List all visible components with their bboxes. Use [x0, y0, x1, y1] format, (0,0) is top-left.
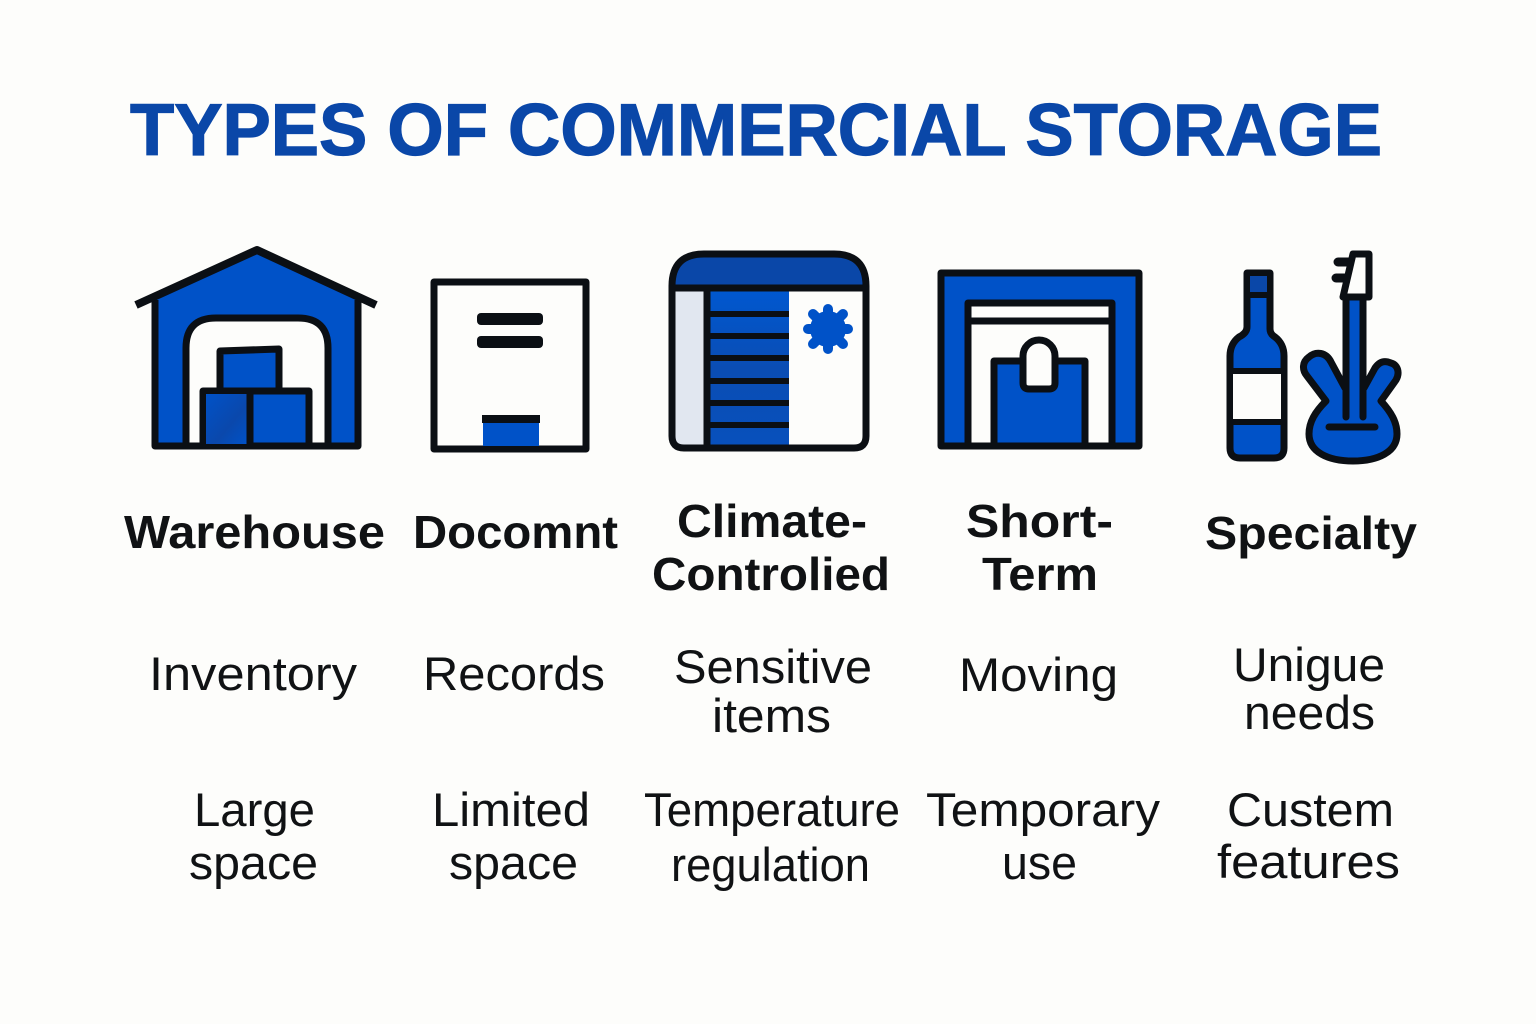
icon: document storage [434, 282, 586, 449]
feature: Temperature regulation: Temperature [644, 783, 900, 836]
icon: short-term unit [941, 273, 1139, 446]
use: Sensitive items: items [712, 689, 831, 742]
label: Docomnt: Docomnt [413, 506, 618, 558]
column: document [413, 282, 618, 889]
label: Climate-Controlied: Controlied [652, 548, 890, 600]
column: climate-controlled [644, 254, 900, 891]
use: Sensitive items: Sensitive [674, 640, 872, 693]
use: Sensitive items [674, 640, 872, 742]
feature: Temporary use: Temporary [926, 783, 1161, 836]
label: Short-Term [966, 495, 1113, 600]
title: TYPES OF COMMERCIAL STORAGE [130, 90, 1382, 171]
use: Unigue needs: needs [1244, 686, 1375, 739]
use: Unigue needs: Unigue [1233, 638, 1385, 691]
feature: Custem features: features [1217, 835, 1400, 888]
feature: Temporary use [926, 783, 1161, 889]
column: specialty [1205, 254, 1417, 888]
label: Specialty: Specialty [1205, 507, 1417, 559]
feature: Temperature regulation [644, 783, 900, 891]
feature: Limited space: space [449, 836, 578, 889]
icon: climate-controlled unit [672, 254, 866, 448]
feature: Large space: Large [194, 783, 315, 836]
use: Moving: Moving [959, 648, 1118, 701]
column: short-term [926, 273, 1161, 889]
label: Short-Term: Short- [966, 495, 1113, 547]
icon: snowflake gear [808, 309, 848, 349]
feature: Custem features: Custem [1227, 783, 1394, 836]
column: warehouse [124, 250, 385, 889]
label: Short-Term: Term [982, 548, 1098, 600]
use: Inventory: Inventory [149, 647, 358, 700]
label: Warehouse: Warehouse [124, 506, 385, 558]
use: Unigue needs [1233, 638, 1385, 739]
icon: warehouse [136, 250, 376, 446]
label: Climate-Controlied [652, 495, 890, 600]
feature: Limited space: Limited [432, 783, 590, 836]
icon: guitar [1303, 254, 1398, 461]
label: Climate-Controlied: Climate- [677, 495, 867, 547]
icon: wine bottle [1230, 273, 1284, 458]
feature: Limited space [432, 783, 590, 889]
feature: Temperature regulation: regulation [671, 838, 870, 891]
feature: Large space [189, 783, 318, 889]
use: Records: Records [423, 647, 605, 700]
feature: Large space: space [189, 836, 318, 889]
feature: Custem features [1217, 783, 1400, 888]
feature: Temporary use: use [1002, 836, 1077, 889]
